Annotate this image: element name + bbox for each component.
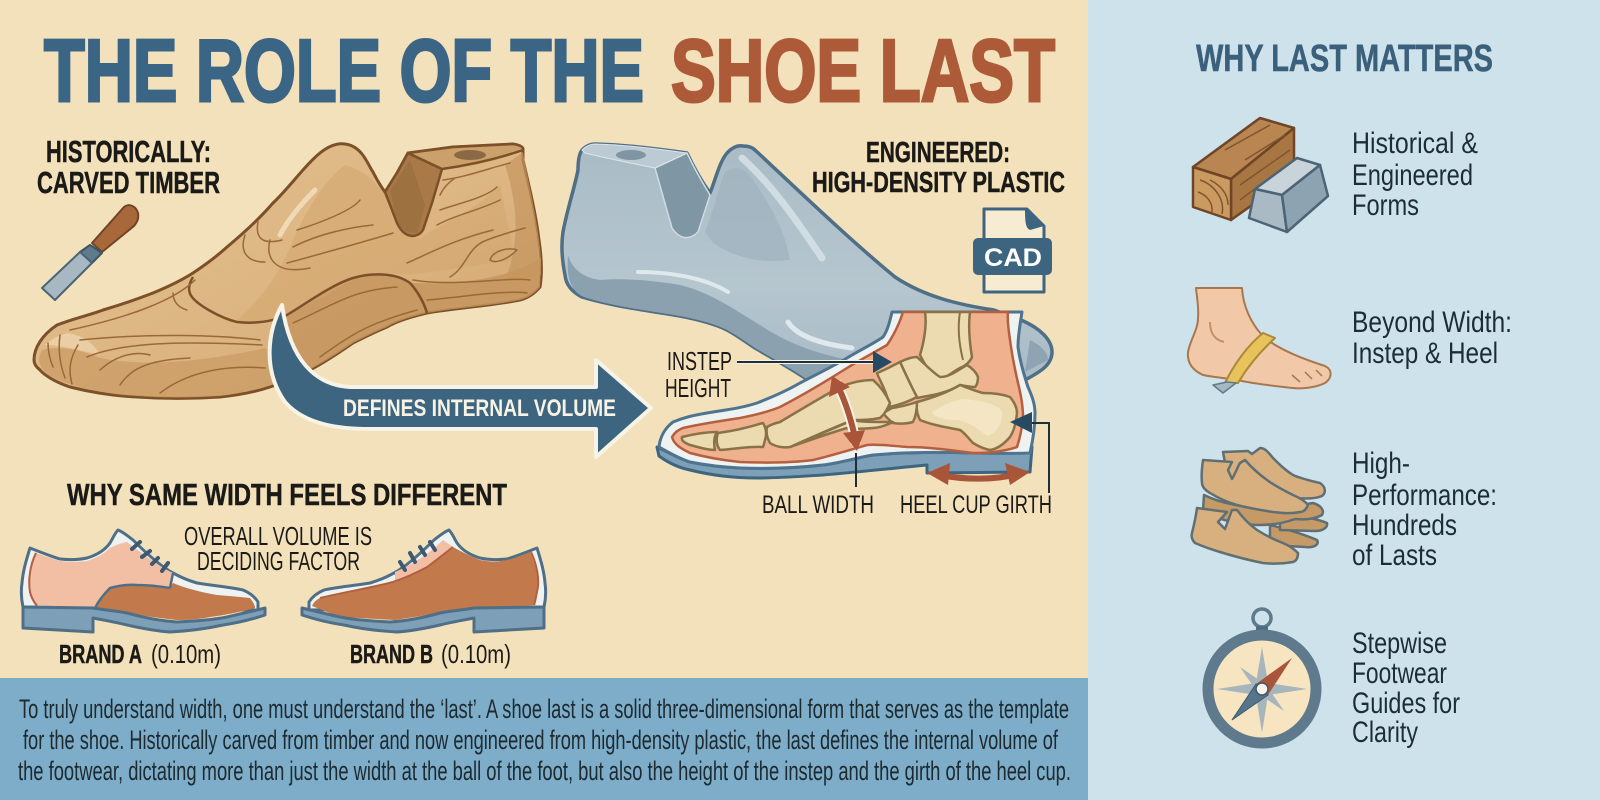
right side shading (505, 152, 541, 280)
illustration: brand A shoe (21, 530, 265, 632)
text: beyond width (1352, 306, 1512, 370)
vamp line (189, 274, 427, 323)
arrow: heel cup girth (927, 412, 1049, 493)
top cut face (408, 144, 523, 169)
text: high-performance lasts: Performance: (1352, 479, 1497, 512)
panel: right sidebar background (1088, 0, 1600, 800)
underside shading (568, 255, 860, 380)
label: brand B width: BRAND B (350, 639, 433, 669)
text: high-performance lasts: Hundreds (1352, 509, 1457, 542)
label: brand B width: (0.10m) (441, 639, 511, 669)
text: historical and engineered forms: Engineered (1352, 159, 1473, 192)
toe side band (39, 348, 310, 398)
text: beyond width: Instep & Heel (1352, 337, 1498, 370)
inner vamp shade (705, 168, 790, 261)
text: high-performance lasts (1352, 447, 1497, 572)
arrow: defines internal volume: DEFINES INTERNAL VOLUME (343, 395, 616, 422)
icon: CAD file (973, 209, 1052, 292)
panel: bottom description band (0, 678, 1088, 800)
callout: overall volume (184, 521, 372, 576)
text: stepwise footwear guides: Footwear (1352, 657, 1447, 690)
label: historically carved timber: CARVED TIMBER (37, 165, 220, 200)
slot face (655, 153, 710, 238)
text: historical and engineered forms: Forms (1352, 189, 1419, 222)
illustration: plastic shoe last (562, 144, 1052, 380)
icon: stack of lasts (1192, 448, 1327, 564)
title: SHOE LAST (671, 21, 1055, 120)
text: stepwise footwear guides: Stepwise (1352, 627, 1447, 660)
label: engineered high-density plastic (812, 137, 1065, 199)
panel: main background (0, 0, 1088, 800)
label: instep height: HEIGHT (665, 373, 731, 403)
top face (582, 144, 687, 168)
body text: for the shoe. Historically carved from timber and now engineered from high-density plastic, the last defines the internal volume of (23, 725, 1058, 755)
text: beyond width: Beyond Width: (1352, 306, 1512, 339)
illustration: foot cross-section with bones (657, 312, 1035, 478)
label: brand A width: (0.10m) (151, 639, 221, 669)
label: brand A width: BRAND A (59, 639, 142, 669)
callout: overall volume: DECIDING FACTOR (197, 546, 360, 576)
toe highlight (45, 333, 100, 355)
icon: CAD file: CAD (984, 244, 1042, 272)
text: high-performance lasts: of Lasts (1352, 539, 1437, 572)
arrow: defines internal volume (270, 305, 651, 457)
highlights (742, 158, 822, 258)
label: historically carved timber (37, 134, 220, 200)
shoe shell (659, 312, 1035, 468)
icon: chisel (42, 205, 138, 300)
text: high-performance lasts: High- (1352, 447, 1410, 480)
heading: why same width feels different: WHY SAME WIDTH FEELS DIFFERENT (67, 477, 507, 512)
middle shaded wedge (235, 165, 515, 322)
bones (920, 312, 972, 378)
illustration: wooden shoe last (34, 144, 541, 398)
icon: wood block and metal block (1193, 118, 1328, 232)
heading: why last matters: WHY LAST MATTERS (1196, 38, 1493, 80)
body text: the footwear, dictating more than just the width at the ball of the foot, but also the height of the instep and the girth of the heel cup. (18, 756, 1071, 786)
sole (657, 447, 1032, 478)
label: engineered high-density plastic: HIGH-DENSITY PLASTIC (812, 167, 1065, 199)
arrow: ball width double arrow (829, 376, 865, 487)
text: stepwise footwear guides (1352, 627, 1460, 749)
label: ball width: BALL WIDTH (762, 491, 874, 519)
text: stepwise footwear guides: Guides for (1352, 687, 1460, 720)
slot dark face (385, 153, 442, 236)
body text: To truly understand width, one must understand the ‘last’. A shoe last is a solid three-dimensional form that serves as the template (19, 694, 1069, 724)
label: instep height: INSTEP (667, 346, 732, 376)
highlight streak (280, 190, 315, 235)
body text (18, 694, 1071, 786)
title: THE ROLE OF THE (44, 21, 644, 120)
skin (672, 312, 1023, 463)
text: historical and engineered forms: Historical & (1352, 127, 1478, 160)
label: historically carved timber: HISTORICALLY: (46, 134, 211, 169)
icon: foot with measuring tape (1188, 288, 1331, 393)
illustration: brand B shoe (302, 530, 546, 632)
lower heel band (277, 258, 541, 372)
callout: overall volume: OVERALL VOLUME IS (184, 521, 372, 551)
label: heel cup girth: HEEL CUP GIRTH (900, 491, 1052, 519)
label: engineered high-density plastic: ENGINEERED: (866, 137, 1010, 169)
text: historical and engineered forms (1352, 127, 1478, 222)
text: stepwise footwear guides: Clarity (1352, 716, 1418, 749)
icon: compass (1208, 609, 1316, 743)
label: instep height (665, 346, 892, 403)
wood grain (48, 163, 530, 393)
